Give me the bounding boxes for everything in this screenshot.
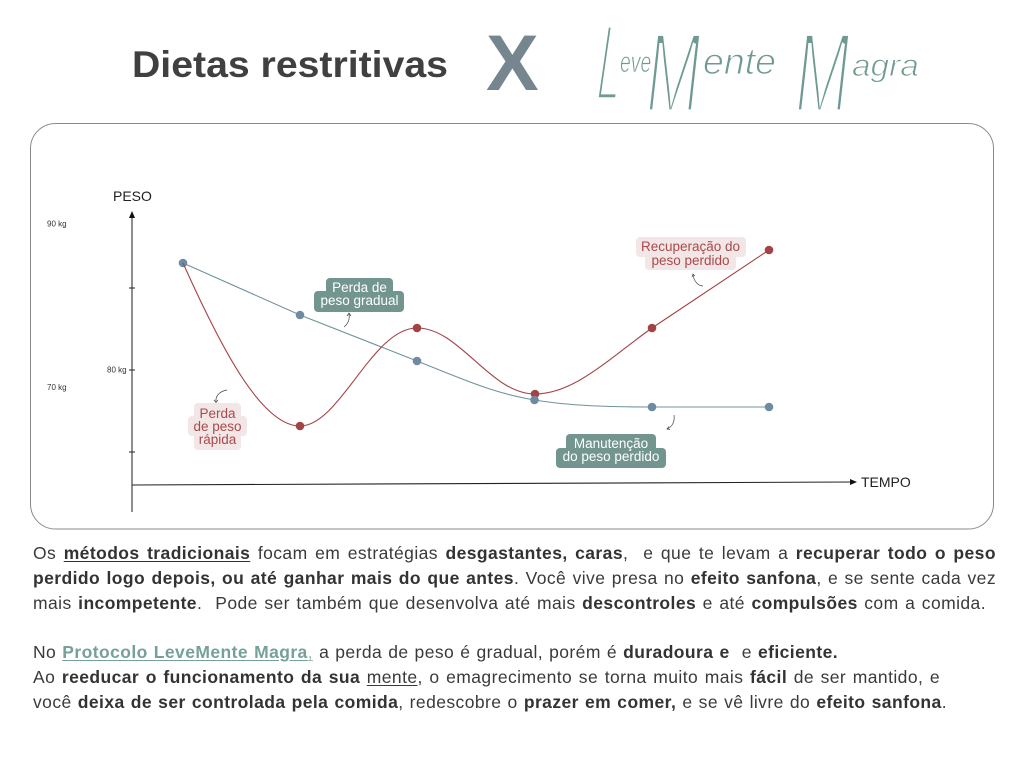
panel: weight chart bbox=[30, 124, 994, 529]
title: Dietas restritivas: Dietas restritivas bbox=[132, 44, 448, 85]
callout: Perda de peso rápida: Perda bbox=[199, 406, 236, 421]
arrow: to recovery callout bbox=[692, 274, 703, 286]
callout: Recuperação do peso perdido bbox=[636, 237, 746, 270]
callout: Perda de peso rápida: de peso bbox=[193, 419, 242, 434]
paragraph: LeveMente Magra protocol: você deixa de ser controlada pela comida, redescobre o prazer em comer, e se vê livre do efeito sanfona. bbox=[33, 692, 947, 712]
callout: Perda de peso gradual: Perda de bbox=[332, 280, 387, 295]
paragraph: traditional methods: mais incompetente. Pode ser também que desenvolva até mais descontroles e até compulsões com a comida. bbox=[33, 593, 986, 613]
tick label: 70 kg: 70 kg bbox=[47, 383, 67, 392]
tick label: 80 kg: 80 kg bbox=[107, 366, 127, 374]
y axis bbox=[129, 211, 135, 512]
callout: Perda de peso gradual bbox=[314, 278, 404, 312]
axis label: PESO: PESO bbox=[113, 188, 152, 204]
logo: LeveMente Magra: M bbox=[795, 9, 850, 136]
blue dot at crossing bbox=[530, 396, 539, 404]
logo: LeveMente Magra: ente bbox=[703, 40, 776, 82]
versus X: X bbox=[486, 18, 539, 107]
callout: Manutenção do peso perdido: Manutenção bbox=[574, 436, 648, 451]
callout: Manutenção do peso perdido bbox=[556, 434, 666, 468]
paragraph: LeveMente Magra protocol: No Protocolo LeveMente Magra, a perda de peso é gradual, porém é duradoura e e eficiente. bbox=[33, 642, 838, 662]
tick label: 90 kg: 90 kg bbox=[47, 220, 67, 228]
paragraph: LeveMente Magra protocol: Ao reeducar o funcionamento da sua mente, o emagrecimento se torna muito mais fácil de ser mantido, e bbox=[33, 667, 940, 687]
arrow: to gradual callout bbox=[344, 313, 351, 327]
logo: LeveMente Magra bbox=[594, 1, 919, 136]
callout: Perda de peso rápida: rápida bbox=[199, 432, 237, 447]
arrow: to rapid callout bbox=[214, 390, 227, 402]
callout: Manutenção do peso perdido: do peso perdido bbox=[563, 449, 659, 464]
callout: Recuperação do peso perdido: Recuperação do bbox=[641, 239, 740, 254]
logo: LeveMente Magra: M bbox=[646, 9, 701, 136]
blue line: gradual weight loss bbox=[179, 259, 773, 411]
axis label: TEMPO: TEMPO bbox=[861, 474, 911, 490]
logo: LeveMente Magra: L bbox=[594, 1, 626, 124]
callout: Perda de peso rápida bbox=[188, 403, 247, 450]
paragraph: LeveMente Magra protocol bbox=[33, 642, 947, 712]
logo: LeveMente Magra: agra bbox=[852, 47, 919, 83]
callout: Perda de peso gradual: peso gradual bbox=[320, 293, 399, 308]
red line: rapid loss and regain bbox=[183, 246, 773, 430]
x axis bbox=[132, 479, 857, 485]
panel border bbox=[30, 124, 994, 529]
logo: LeveMente Magra: eve bbox=[620, 46, 651, 79]
paragraph: traditional methods: perdido logo depois, ou até ganhar mais do que antes. Você vive presa no efeito sanfona, e se sente cada vez bbox=[33, 568, 996, 588]
callout: Recuperação do peso perdido: peso perdido bbox=[651, 253, 730, 268]
paragraph: traditional methods: Os métodos tradicionais focam em estratégias desgastantes, caras, e que te levam a recuperar todo o peso bbox=[33, 543, 996, 563]
arrow: to maintenance callout bbox=[667, 415, 674, 430]
